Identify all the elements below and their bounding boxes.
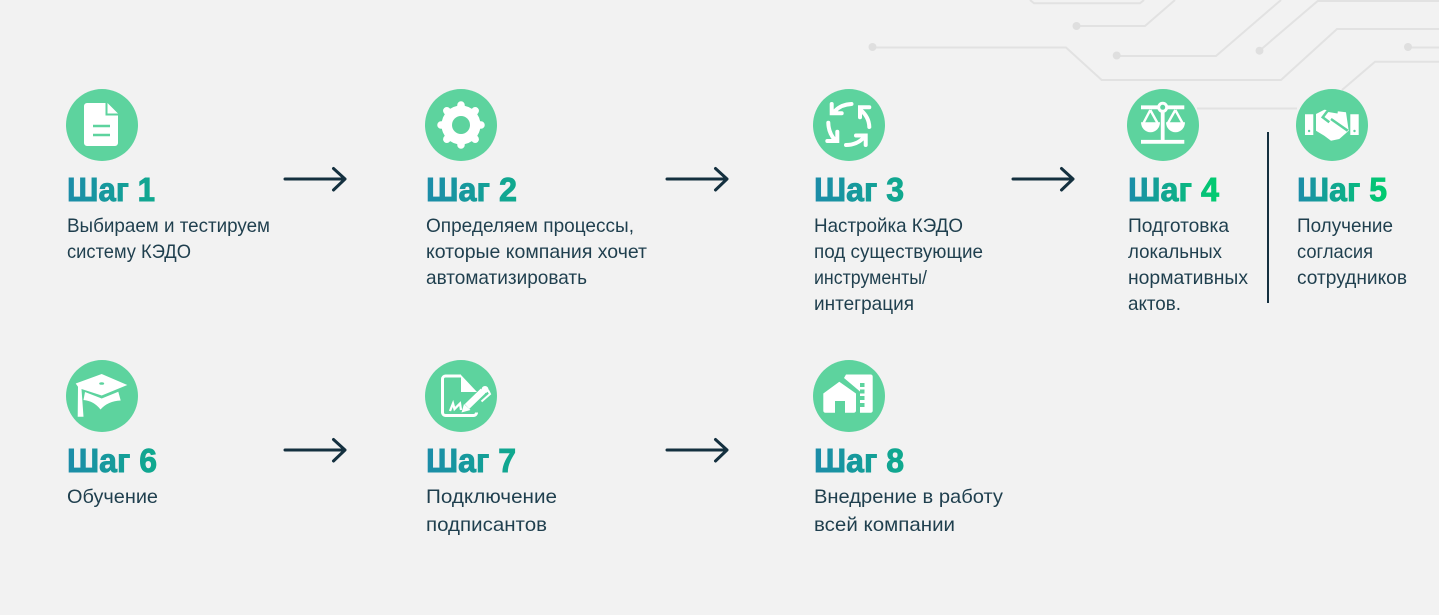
step 1 — [66, 89, 270, 263]
heading: step 5: Шаг 5 — [1297, 171, 1387, 208]
heading: step 8: Шаг 8 — [814, 442, 904, 479]
step 6 — [66, 360, 158, 508]
arrow: step 2 to step 3 — [667, 168, 727, 190]
text: step 2 description: автоматизировать — [426, 267, 587, 289]
text: step 2 description — [426, 215, 647, 289]
step 5 — [1296, 89, 1407, 289]
heading: step 1: Шаг 1 — [67, 171, 155, 208]
arrow: step 3 to step 4 — [1013, 168, 1073, 190]
icon: handshake — [1296, 89, 1368, 161]
text: step 4 description: актов. — [1128, 293, 1181, 315]
arrow: step 1 to step 2 — [285, 168, 345, 190]
divider between step 4 and step 5 — [1267, 132, 1269, 303]
text: step 3 description: инструменты/ — [814, 267, 928, 289]
text: step 1 description: систему КЭДО — [67, 241, 191, 263]
step 3 — [813, 89, 983, 315]
step 7 — [425, 360, 557, 536]
heading: step 7: Шаг 7 — [426, 442, 516, 479]
text: step 8 description: всей компании — [814, 514, 955, 536]
text: step 3 description: интеграция — [814, 293, 914, 315]
text: step 1 description — [67, 215, 270, 263]
text: step 8 description — [814, 486, 1003, 536]
heading: step 3: Шаг 3 — [814, 171, 904, 208]
text: step 2 description: которые компания хочет — [426, 241, 647, 263]
step 2 — [425, 89, 647, 289]
text: step 3 description — [814, 215, 983, 315]
text: step 7 description: подписантов — [426, 514, 547, 536]
icon: buildings — [813, 360, 885, 432]
text: step 4 description: нормативных — [1128, 267, 1248, 289]
text: step 1 description: Выбираем и тестируем — [67, 215, 270, 237]
icon: gear — [425, 89, 497, 161]
text: step 3 description: Настройка КЭДО — [814, 215, 963, 237]
step 4 — [1127, 89, 1248, 315]
step 8 — [813, 360, 1003, 536]
text: step 7 description: Подключение — [426, 486, 557, 508]
text: step 7 description — [426, 486, 557, 536]
text: step 6 description: Обучение — [67, 486, 158, 508]
arrow: step 6 to step 7 — [285, 440, 345, 461]
text: step 5 description — [1297, 215, 1407, 289]
heading: step 4: Шаг 4 — [1128, 171, 1220, 208]
icon: scales — [1127, 89, 1199, 161]
text: step 8 description: Внедрение в работу — [814, 486, 1003, 508]
text: step 4 description: Подготовка — [1128, 215, 1229, 237]
text: step 5 description: сотрудников — [1297, 267, 1407, 289]
icon: signed document — [425, 360, 497, 432]
text: step 3 description: под существующие — [814, 241, 983, 263]
icon: cycle arrows — [813, 89, 885, 161]
heading: step 2: Шаг 2 — [426, 171, 517, 208]
text: step 4 description: локальных — [1128, 241, 1222, 263]
icon: document — [66, 89, 138, 161]
text: step 2 description: Определяем процессы, — [426, 215, 634, 237]
text: step 5 description: согласия — [1297, 241, 1373, 263]
icon: graduation cap — [66, 360, 138, 432]
text: step 4 description — [1128, 215, 1248, 315]
heading: step 6: Шаг 6 — [67, 442, 157, 479]
text: step 5 description: Получение — [1297, 215, 1393, 237]
arrow: step 7 to step 8 — [667, 440, 727, 461]
